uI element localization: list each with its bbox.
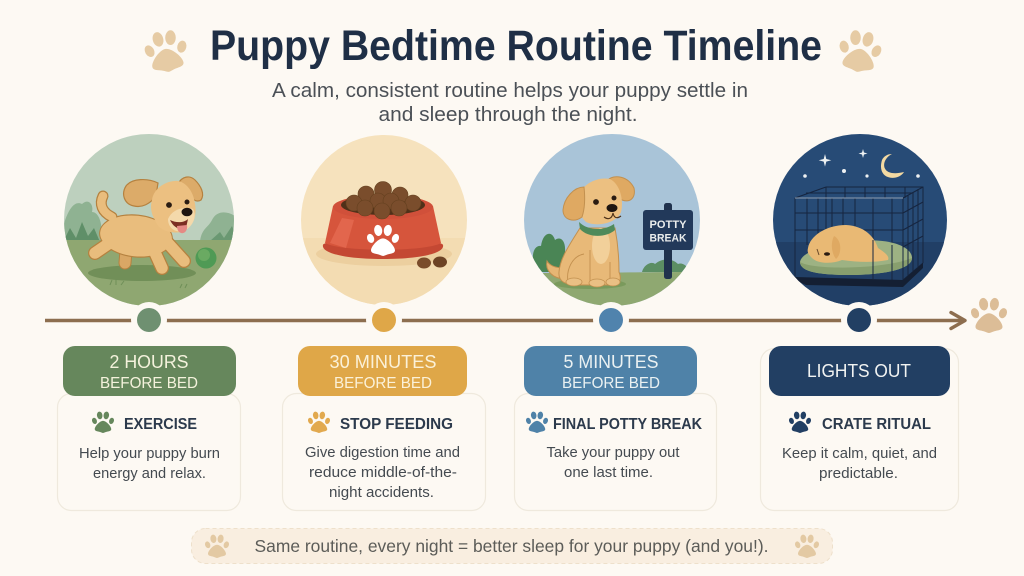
time label: BEFORE BED <box>334 375 432 392</box>
description: reduce middle-of-the- <box>309 465 457 481</box>
illustration: food bowl <box>301 135 467 304</box>
sign post <box>664 203 672 279</box>
description: night accidents. <box>329 485 434 501</box>
left ear <box>124 180 158 207</box>
description: Give digestion time and <box>305 445 460 461</box>
icon: timeline end paw <box>970 297 1008 333</box>
time badge <box>769 346 950 396</box>
left ear <box>563 187 585 220</box>
icon: paw <box>788 411 812 433</box>
heading: CRATE RITUAL <box>822 416 931 433</box>
description <box>546 445 680 481</box>
puppy outline <box>95 196 184 268</box>
panel: stop feeding <box>282 346 486 510</box>
crate tray <box>795 263 923 287</box>
timeline arrow <box>45 312 965 328</box>
description: one last time. <box>564 465 653 481</box>
description: energy and relax. <box>93 466 206 482</box>
illustration: puppy exercising <box>64 134 234 306</box>
illustration: potty break <box>520 130 705 310</box>
description: Take your puppy out <box>546 445 680 461</box>
footer text: Same routine, every night = better sleep for your puppy (and you!). <box>254 536 768 556</box>
description: predictable. <box>819 466 898 482</box>
sleeping dog <box>808 225 888 263</box>
heading: STOP FEEDING <box>340 416 453 433</box>
bed <box>800 240 912 275</box>
footer banner <box>192 528 832 564</box>
panel: exercise <box>58 346 240 510</box>
icon: title paw right <box>835 27 885 75</box>
description <box>782 446 937 482</box>
time label: 30 MINUTES <box>330 352 436 372</box>
icon: footer paw right <box>794 534 820 558</box>
time badge <box>298 346 467 396</box>
illustration: crate at night <box>770 130 950 312</box>
illustration: potty break: POTTY <box>650 219 687 231</box>
title: Puppy Bedtime Routine Timeline <box>210 22 822 70</box>
time badge <box>63 346 236 396</box>
timeline dot: 2 hours <box>131 302 167 338</box>
moon <box>881 154 904 178</box>
description: Keep it calm, quiet, and <box>782 446 937 462</box>
timeline dot: lights out <box>841 302 877 338</box>
heading: EXERCISE <box>124 416 197 433</box>
head <box>151 181 196 232</box>
subtitle: A calm, consistent routine helps your puppy settle in <box>272 80 748 102</box>
right ear <box>608 177 634 201</box>
crate back wires <box>795 187 923 263</box>
description: Help your puppy burn <box>79 446 220 462</box>
card <box>514 394 716 510</box>
ball <box>196 248 216 268</box>
icon: paw <box>525 411 549 433</box>
timeline dot: 5 minutes <box>593 302 629 338</box>
bowl sides <box>325 206 441 250</box>
time label <box>100 352 198 392</box>
icon: paw <box>91 411 115 433</box>
time label: BEFORE BED <box>562 375 660 392</box>
icon: footer paw left <box>204 534 230 558</box>
collar <box>579 222 615 236</box>
tail <box>546 260 560 279</box>
timeline dot: 30 minutes <box>366 302 402 338</box>
illustration: potty break: BREAK <box>650 232 687 244</box>
wire crate front <box>795 187 923 280</box>
time label: LIGHTS OUT <box>807 361 911 381</box>
time label: 2 HOURS <box>110 352 188 372</box>
heading: FINAL POTTY BREAK <box>553 416 703 433</box>
card <box>282 394 486 510</box>
right ear <box>178 177 203 201</box>
time label <box>330 352 436 392</box>
icon: title paw left <box>141 27 191 75</box>
puppy fill <box>95 196 184 268</box>
body <box>559 228 620 285</box>
icon: paw <box>307 411 331 433</box>
card <box>760 348 958 510</box>
time badge <box>524 346 697 396</box>
head <box>582 178 622 224</box>
panel: final potty break <box>514 346 716 510</box>
time label: 5 MINUTES <box>564 352 658 372</box>
time label: BEFORE BED <box>100 375 198 392</box>
description <box>79 446 220 482</box>
bowl base <box>322 243 444 259</box>
far rear leg <box>125 250 126 263</box>
panel: crate ritual <box>760 346 958 510</box>
subtitle <box>272 80 748 126</box>
sign <box>643 210 693 250</box>
description <box>305 445 460 501</box>
subtitle: and sleep through the night. <box>378 104 638 126</box>
card <box>58 394 240 510</box>
time label <box>562 352 660 392</box>
